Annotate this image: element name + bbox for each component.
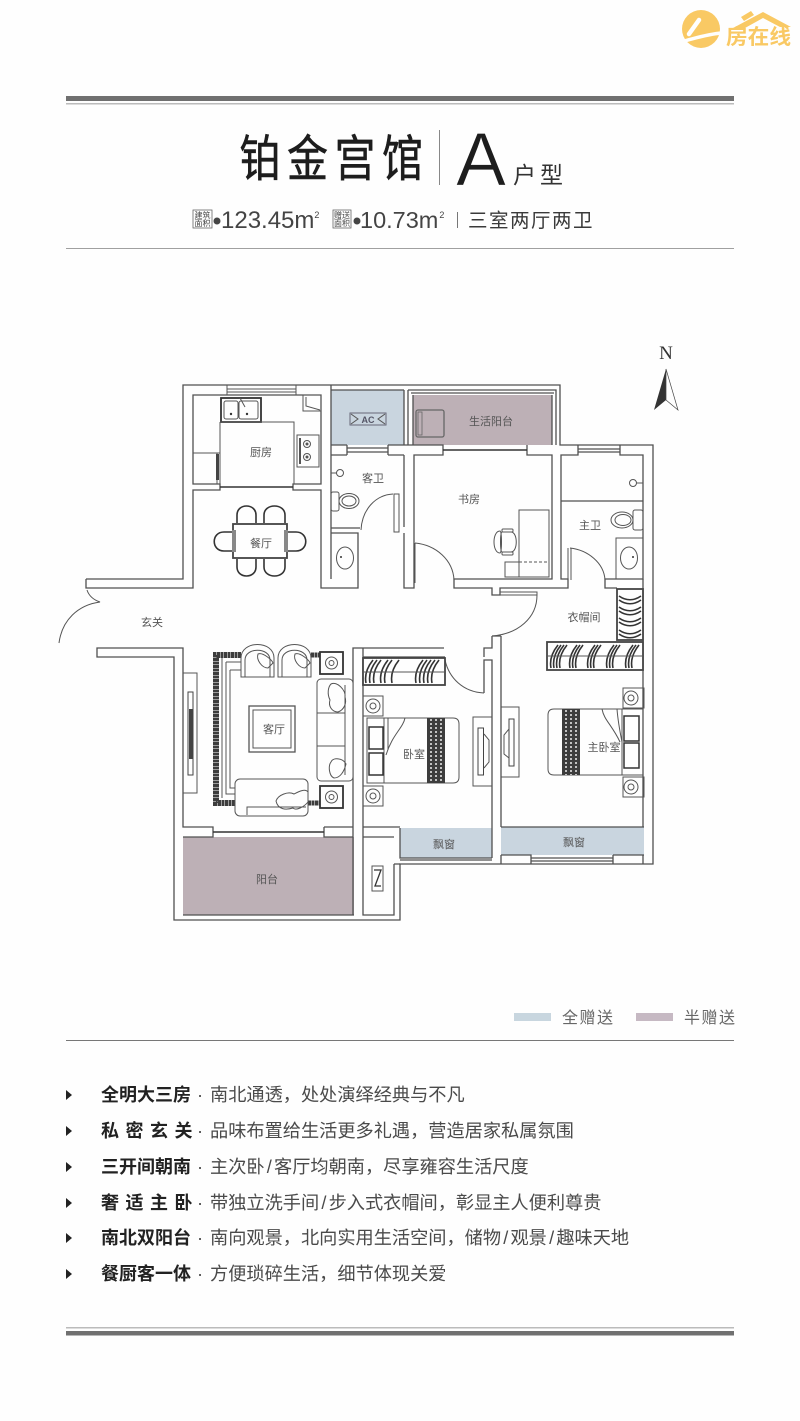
room labels: 厨房	[250, 446, 272, 459]
fridge	[193, 453, 220, 484]
point 6	[66, 1263, 446, 1284]
built area tag: 面积	[194, 218, 210, 228]
point 2: ·	[197, 1121, 203, 1141]
coffee table	[249, 706, 295, 752]
logo: 房在线: 房在线	[726, 26, 791, 49]
flue	[303, 395, 321, 411]
floor plan	[59, 385, 653, 920]
room labels: 主卫	[579, 519, 601, 532]
bed	[367, 718, 459, 783]
point 6: ·	[197, 1264, 203, 1284]
utility unit	[372, 866, 383, 891]
wardrobe	[363, 658, 445, 685]
basin	[336, 547, 354, 569]
air conditioner mark: AC	[362, 415, 375, 425]
gift area tag: 面积	[334, 218, 350, 228]
gift area tag: 赠送	[334, 210, 350, 220]
title	[240, 117, 567, 201]
point 2	[66, 1120, 574, 1141]
side tables	[320, 652, 343, 808]
room fills	[183, 390, 644, 915]
gift area tag	[333, 210, 360, 228]
legend: half gift: 半赠送	[684, 1009, 737, 1027]
legend: half gift	[636, 1009, 737, 1027]
dining table and chairs	[214, 506, 306, 576]
pillows	[369, 727, 383, 749]
room labels: 客厅	[263, 722, 285, 736]
sink	[221, 398, 261, 422]
room labels: 客卫	[362, 471, 384, 485]
armchairs	[241, 644, 311, 677]
point 6: 餐厨客一体	[101, 1263, 191, 1284]
walk-in wardrobe	[547, 589, 643, 670]
built area tag: 建筑	[194, 210, 210, 220]
gift area value: 10.73m	[360, 207, 438, 233]
room labels: 卧室	[403, 747, 425, 761]
room labels: 餐厅	[250, 536, 272, 550]
gift area value: 2	[439, 210, 444, 220]
point 1	[66, 1084, 465, 1105]
floor drain	[336, 470, 344, 476]
legend: full gift	[514, 1009, 615, 1027]
point 3	[66, 1157, 529, 1177]
bottom sofa	[235, 779, 308, 816]
toilet	[331, 492, 339, 511]
point 3: ·	[197, 1157, 203, 1177]
room labels: 书房	[458, 493, 480, 506]
separator	[457, 212, 458, 228]
room labels	[141, 414, 620, 886]
legend	[514, 1009, 737, 1027]
point 4: 带独立洗手间/步入式衣帽间，彰显主人便利尊贵	[210, 1193, 601, 1213]
point 4: ·	[197, 1193, 203, 1213]
room labels: 阳台	[256, 872, 278, 886]
legend rule	[66, 1040, 734, 1041]
point 5: 南向观景，北向实用生活空间，储物/观景/趣味天地	[210, 1228, 629, 1248]
tv	[501, 707, 519, 777]
compass	[654, 343, 678, 410]
study desk and chair	[494, 510, 549, 577]
walls	[86, 385, 653, 920]
room labels: 玄关	[141, 615, 163, 629]
point 2: 私密玄关	[101, 1120, 199, 1141]
point 3: 三开间朝南	[101, 1157, 191, 1177]
kitchen fixtures	[193, 385, 321, 484]
title: unit letter A: A	[456, 117, 506, 201]
nightstands	[623, 688, 644, 708]
top double rule	[66, 96, 734, 104]
guest bath fixtures	[331, 470, 359, 569]
room labels: 主卧室	[588, 740, 620, 754]
door swings	[59, 494, 605, 693]
master bedroom furniture	[501, 688, 644, 797]
bed	[548, 709, 643, 775]
air conditioner mark	[350, 413, 386, 425]
point 1: ·	[197, 1085, 203, 1105]
logo: 房在线	[682, 10, 791, 49]
tv	[473, 717, 492, 786]
point 3: 主次卧/客厅均朝南，尽享雍容生活尺度	[210, 1157, 529, 1177]
sliding doors	[213, 450, 527, 832]
point 1: 全明大三房	[101, 1084, 191, 1105]
point 6: 方便琐碎生活，细节体现关爱	[210, 1264, 446, 1284]
rug	[216, 655, 320, 803]
compass letter: N	[659, 343, 673, 364]
built area value: 123.45m	[221, 207, 314, 234]
legend: full gift: 全赠送	[562, 1009, 615, 1027]
point 5: ·	[197, 1228, 203, 1248]
room labels: 生活阳台	[469, 414, 513, 428]
window	[227, 385, 296, 395]
living room furniture	[183, 644, 353, 816]
bottom double rule	[66, 1327, 734, 1336]
counter	[220, 422, 294, 484]
built area tag	[193, 210, 220, 228]
room labels: 飘窗	[563, 835, 585, 849]
point 4: 奢适主卧	[101, 1193, 199, 1213]
title: project name: 铂金宫馆	[240, 131, 429, 187]
room labels: 飘窗	[433, 837, 455, 851]
title: unit type: 户型	[513, 162, 567, 188]
nightstands	[363, 696, 383, 716]
washer	[416, 410, 444, 437]
room labels: 衣帽间	[568, 610, 600, 624]
title divider	[439, 130, 440, 185]
master bath fixtures	[611, 480, 643, 579]
pillows	[624, 716, 639, 741]
compass needle	[654, 369, 678, 410]
selling points list	[66, 1084, 629, 1284]
layout: 三室两厅两卫	[468, 210, 594, 232]
bedroom furniture	[363, 658, 492, 806]
area and layout line	[193, 207, 594, 234]
tv	[183, 673, 197, 793]
point 2: 品味布置给生活更多礼遇，营造居家私属氛围	[210, 1121, 574, 1141]
point 1: 南北通透，处处演绎经典与不凡	[210, 1085, 465, 1105]
stove	[297, 435, 319, 467]
point 5: 南北双阳台	[101, 1227, 191, 1248]
right sofa	[317, 679, 353, 781]
built area value: 2	[314, 210, 319, 220]
header rule	[66, 248, 734, 249]
